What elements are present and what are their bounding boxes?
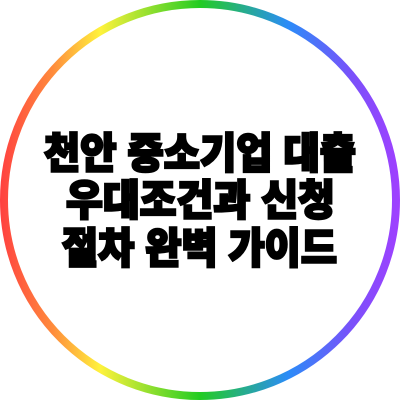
- title: [44, 130, 356, 272]
- title line 1: 천안 중소기업 대출: [44, 130, 356, 177]
- title line 3: 절차 완벽 가이드: [62, 225, 337, 272]
- title line 2: 우대조건과 신청: [66, 177, 335, 224]
